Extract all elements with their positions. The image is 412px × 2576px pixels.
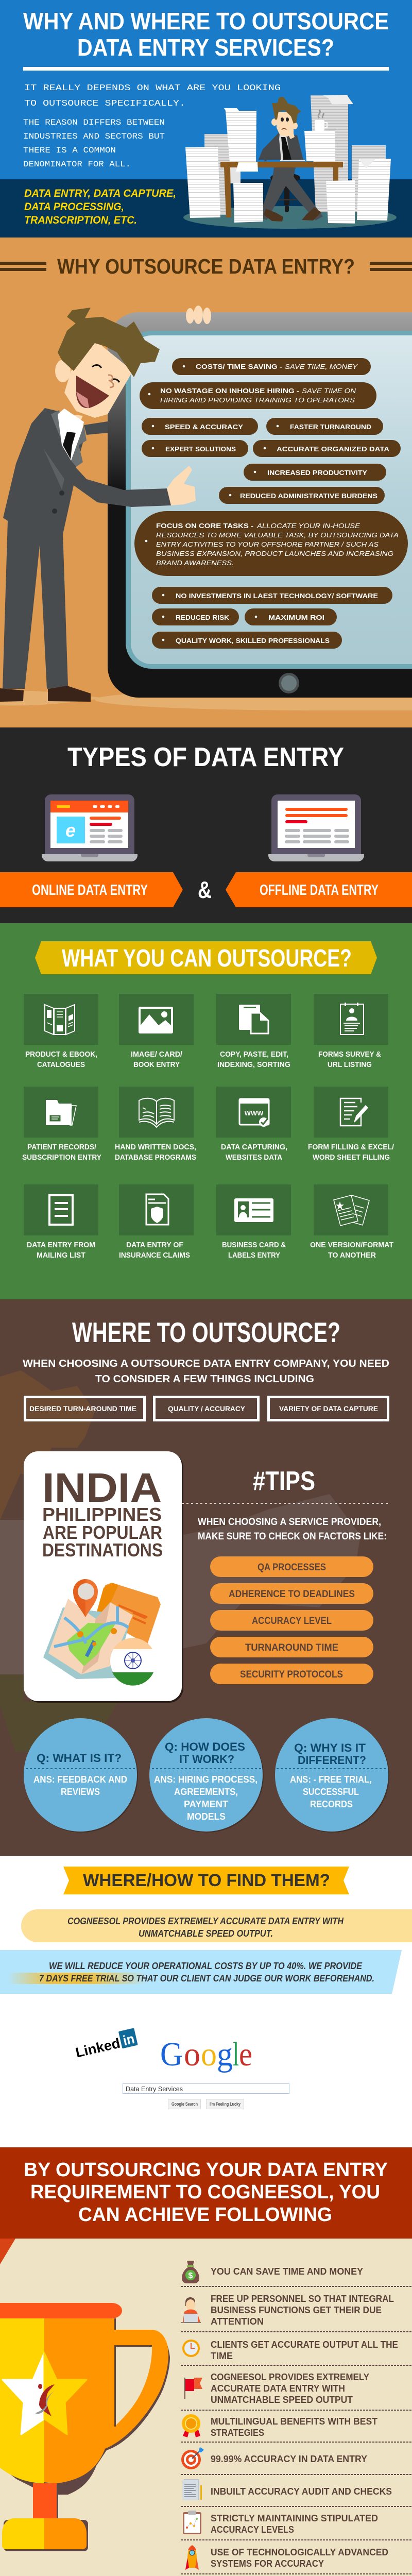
intro text block: INDUSTRIES AND SECTORS BUT <box>23 132 165 141</box>
yellow services text: DATA PROCESSING, <box>24 201 124 213</box>
benefits list text: ATTENTION <box>211 2316 264 2327</box>
panel: where to outsource: VARIETY OF DATA CAPTURE <box>279 1404 378 1413</box>
tile labels: DATABASE PROGRAMS <box>115 1153 196 1162</box>
service tiles <box>24 994 388 1235</box>
tips intro: MAKE SURE TO CHECK ON FACTORS LIKE: <box>198 1531 387 1542</box>
heading ribbon: WHERE/HOW TO FIND THEM? <box>83 1871 330 1890</box>
search box: Data Entry Services <box>126 2085 183 2093</box>
tile labels: SUBSCRIPTION ENTRY <box>22 1153 101 1162</box>
icon: online laptop <box>42 794 138 861</box>
search buttons: I'm Feeling Lucky <box>210 2102 241 2107</box>
intro text block: IT REALLY DEPENDS ON WHAT ARE YOU LOOKING <box>24 83 281 93</box>
icon: trophy <box>0 2303 170 2551</box>
intro text block: DENOMINATOR FOR ALL. <box>23 160 131 169</box>
card: popular destinations: ARE POPULAR <box>43 1522 162 1543</box>
icon: brochure <box>45 1005 75 1035</box>
icon: business card <box>234 1198 273 1222</box>
Q&A ellipse: what is it <box>24 1718 138 1833</box>
logo: Google <box>160 2036 252 2073</box>
intro text block <box>23 83 281 169</box>
callout: accuracy: COGNEESOL PROVIDES EXTREMELY ACCURATE DATA ENTRY WITH <box>67 1916 344 1926</box>
chair <box>270 173 300 212</box>
benefit pill text: BRAND AWARENESS. <box>156 559 234 567</box>
benefits list text: FREE UP PERSONNEL SO THAT INTEGRAL <box>211 2294 394 2304</box>
benefit pill text: INCREASED PRODUCTIVITY <box>267 469 367 477</box>
Q&A ellipse: how does it work <box>149 1718 264 1833</box>
Q&A ellipse: how does it work: ANS: HIRING PROCESS, <box>154 1774 258 1785</box>
icon: copy paste <box>239 1005 268 1033</box>
tip pills: QA PROCESSES <box>258 1562 326 1573</box>
benefits list text: CLIENTS GET ACCURATE OUTPUT ALL THE <box>211 2340 398 2350</box>
Q&A ellipse: why is it different: ANS: - FREE TRIAL, <box>290 1774 372 1785</box>
benefit pill text: SPEED & ACCURACY <box>165 423 243 431</box>
panel: where/how to find them <box>0 1856 412 2147</box>
Q&A ellipse: why is it different <box>275 1718 389 1833</box>
icon: medal <box>182 2414 200 2437</box>
icon: offline laptop <box>268 794 364 861</box>
icon: document and pencil <box>182 2479 202 2500</box>
benefit pill text: HIRING AND PROVIDING TRAINING TO OPERATORS <box>160 396 355 404</box>
heading ribbon <box>63 1867 349 1894</box>
tip pills: TURNAROUND TIME <box>245 1642 338 1653</box>
title <box>23 8 389 71</box>
dashed list dividers <box>181 2286 412 2576</box>
logo: Google: l <box>233 2036 239 2073</box>
icon: money bag: $ <box>188 2272 193 2280</box>
icon: mailing list doc <box>49 1195 73 1225</box>
Q&A ellipse: what is it: Q: WHAT IS IT? <box>37 1752 122 1765</box>
tile labels: FORMS SURVEY & <box>318 1050 381 1059</box>
tile labels: TO ANOTHER <box>328 1251 376 1260</box>
yellow services text: DATA ENTRY, DATA CAPTURE, <box>24 188 176 199</box>
benefits list text: STRICTLY MAINTAINING STIPULATED <box>211 2513 378 2523</box>
Q&A ellipse: why is it different: SUCCESSFUL <box>303 1787 359 1797</box>
benefits list text: USE OF TECHNOLOGICALLY ADVANCED <box>211 2547 388 2557</box>
heading: REQUIREMENT TO COGNEESOL, YOU <box>30 2181 380 2203</box>
benefits list text: STRATEGIES <box>211 2428 264 2438</box>
card: popular destinations: PHILIPPINES <box>42 1504 162 1525</box>
yellow services text <box>24 188 176 226</box>
logo: LinkedIn: in <box>122 2031 136 2048</box>
search buttons <box>168 2099 244 2109</box>
search buttons: Google Search <box>171 2102 198 2107</box>
title: DATA ENTRY SERVICES? <box>77 34 334 61</box>
benefit pill text: MAXIMUM ROI <box>268 614 324 621</box>
panel: achievements <box>0 2147 412 2576</box>
yellow services text: TRANSCRIPTION, ETC. <box>24 214 137 226</box>
benefit pill text: ENTRY ACTIVITIES TO YOUR OFFSHORE PARTNER / SUCH AS <box>156 540 379 548</box>
benefits list text: YOU CAN SAVE TIME AND MONEY <box>211 2266 363 2277</box>
tile labels: CATALOGUES <box>37 1060 85 1069</box>
panel: where to outsource: DESIRED TURN-AROUND TIME <box>29 1404 136 1413</box>
benefit pill text: SAVE TIME ON <box>302 387 356 395</box>
icon: www window: WWW <box>245 1109 264 1117</box>
benefit pill text: RESOURCES TO MORE VALUABLE TASK, BY OUTSOURCING DATA <box>156 531 399 539</box>
tile labels: BOOK ENTRY <box>133 1060 180 1069</box>
logo: Google: o <box>184 2036 200 2073</box>
tile labels: WORD SHEET FILLING <box>313 1153 390 1162</box>
intro text: TO CONSIDER A FEW THINGS INCLUDING <box>95 1374 314 1385</box>
Q&A ellipse: why is it different: RECORDS <box>310 1799 353 1809</box>
tile labels: ONE VERSION/FORMAT <box>310 1241 393 1249</box>
panel: where to outsource: QUALITY / ACCURACY <box>168 1404 246 1413</box>
callout: costs and free trial: 7 DAYS FREE TRIAL SO THAT OUR CLIENT CAN JUDGE OUR WORK BEFOREHAND. <box>39 1973 374 1984</box>
card: popular destinations <box>24 1451 183 1703</box>
Q&A ellipse: why is it different: Q: WHY IS IT <box>294 1741 366 1754</box>
benefit pill text: FASTER TURNAROUND <box>290 423 371 431</box>
benefit pill text: EXPERT SOLUTIONS <box>165 445 236 453</box>
icon: rocket <box>185 2545 199 2570</box>
icon: form filling pen <box>340 1098 368 1126</box>
tile labels: FORM FILLING & EXCEL/ <box>308 1143 394 1151</box>
tile labels: WEBSITES DATA <box>226 1153 282 1162</box>
intro text <box>23 1358 389 1385</box>
panel: where to outsource <box>0 1299 412 1856</box>
intro text block: THE REASON DIFFERS BETWEEN <box>23 118 165 127</box>
heading <box>24 2159 388 2226</box>
intro text: WHEN CHOOSING A OUTSOURCE DATA ENTRY COMPANY, YOU NEED <box>23 1358 389 1369</box>
tip pills <box>210 1556 373 1684</box>
search box <box>123 2083 289 2094</box>
icon: person with laptop <box>181 2297 201 2323</box>
illustration: laughing man pointing at tablet <box>0 308 196 702</box>
benefit pill text <box>156 363 399 645</box>
ampersand: & <box>198 876 212 903</box>
icon: two documents <box>334 1195 369 1226</box>
heading: WHY OUTSOURCE DATA ENTRY? <box>57 255 355 278</box>
tile labels: DATA ENTRY OF <box>126 1241 183 1249</box>
icon: open book <box>139 1098 174 1127</box>
icon: image <box>139 1007 173 1033</box>
tile labels: DATA ENTRY FROM <box>27 1241 95 1249</box>
benefits list text: TIME <box>211 2351 233 2361</box>
tile labels: IMAGE/ CARD/ <box>131 1050 183 1059</box>
background map shapes <box>0 1370 360 1752</box>
tile labels: PATIENT RECORDS/ <box>27 1143 97 1151</box>
desk <box>220 162 343 217</box>
tile labels: MAILING LIST <box>37 1251 85 1260</box>
panel: types of data entry <box>0 727 412 923</box>
benefit pill text: REDUCED RISK <box>176 614 230 621</box>
benefits list text: BUSINESS FUNCTIONS GET THEIR DUE <box>211 2305 382 2315</box>
tile labels: COPY, PASTE, EDIT, <box>220 1050 288 1059</box>
icon: stopwatch clock <box>182 2340 200 2357</box>
tips intro: WHEN CHOOSING A SERVICE PROVIDER, <box>198 1517 381 1528</box>
tile labels: INSURANCE CLAIMS <box>119 1251 190 1260</box>
logo: Google: o <box>201 2036 217 2073</box>
head <box>55 308 160 418</box>
benefit pill text: ACCURATE ORGANIZED DATA <box>277 445 390 453</box>
card: popular destinations: INDIA <box>42 1465 162 1511</box>
benefits list text: ACCURACY LEVELS <box>211 2524 294 2535</box>
intro text block: THERE IS A COMMON <box>23 146 116 155</box>
icon: patient folder <box>46 1100 76 1125</box>
benefit pill text: FOCUS ON CORE TASKS - <box>156 522 253 530</box>
icon: money bag <box>182 2261 199 2283</box>
icon: www window <box>239 1099 269 1127</box>
criteria boxes <box>25 1397 388 1420</box>
benefit pill text: ALLOCATE YOUR IN-HOUSE <box>256 522 360 530</box>
tile labels: LABELS ENTRY <box>228 1251 280 1260</box>
benefits list text: ACCURATE DATA ENTRY WITH <box>211 2383 345 2394</box>
icon: survey form <box>340 1003 364 1035</box>
tip pills: SECURITY PROTOCOLS <box>240 1669 343 1680</box>
logo: Google: g <box>217 2036 233 2073</box>
tile labels: HAND WRITTEN DOCS, <box>115 1143 196 1151</box>
heading: CAN ACHIEVE FOLLOWING <box>78 2204 332 2226</box>
benefit pill text: COSTS/ TIME SAVING - <box>196 363 282 370</box>
benefit pill text: REDUCED ADMINISTRATIVE BURDENS <box>240 492 377 500</box>
tip pills: ADHERENCE TO DEADLINES <box>229 1589 355 1600</box>
logo: LinkedIn: Linked <box>74 2035 122 2061</box>
Q&A ellipse: why is it different: DIFFERENT? <box>298 1754 366 1767</box>
tip pills: ACCURACY LEVEL <box>252 1616 332 1626</box>
tile labels: DATA CAPTURING, <box>221 1143 287 1151</box>
tile labels: INDEXING, SORTING <box>217 1060 290 1069</box>
benefits list text: UNMATCHABLE SPEED OUTPUT <box>211 2395 353 2405</box>
tips heading: #TIPS <box>253 1466 315 1496</box>
tile labels: PRODUCT & EBOOK, <box>25 1050 97 1059</box>
Q&A ellipse: how does it work: MODELS <box>187 1811 226 1822</box>
callout: accuracy <box>21 1909 412 1942</box>
logo mark <box>35 2384 56 2416</box>
intro text block: TO OUTSOURCE SPECIFICALLY. <box>24 99 185 109</box>
benefit pill text: NO INVESTMENTS IN LAEST TECHNOLOGY/ SOFTWARE <box>176 592 378 600</box>
icon: online laptop: e <box>65 820 76 841</box>
benefit pill text: BUSINESS EXPANSION, PRODUCT LAUNCHES AND INCREASING <box>156 550 393 557</box>
callout: costs and free trial: WE WILL REDUCE YOUR OPERATIONAL COSTS BY UP TO 40%. WE PROVIDE <box>49 1961 363 1971</box>
icon: flag <box>184 2378 202 2399</box>
icon: insurance doc <box>146 1194 168 1225</box>
logo: LinkedIn <box>73 2028 138 2061</box>
heading: BY OUTSOURCING YOUR DATA ENTRY <box>24 2159 388 2181</box>
callout: costs and free trial <box>0 1950 402 1994</box>
banner: online data entry: ONLINE DATA ENTRY <box>32 882 148 899</box>
icon: target with dart <box>181 2447 204 2469</box>
logo: Google: G <box>160 2036 183 2073</box>
Q&A ellipse: how does it work: PAYMENT <box>184 1799 228 1809</box>
callout: accuracy: UNMATCHABLE SPEED OUTPUT. <box>139 1928 273 1939</box>
benefit pill text: NO WASTAGE ON INHOUSE HIRING - <box>160 387 299 395</box>
banner: offline data entry <box>226 872 412 907</box>
card: popular destinations: DESTINATIONS <box>42 1539 163 1561</box>
benefits list text: MULTILINGUAL BENEFITS WITH BEST <box>211 2416 377 2427</box>
benefits list text: SYSTEMS FOR ACCURACY <box>211 2558 324 2569</box>
icon: map with pin, booklet and Indian flag <box>43 1579 161 1686</box>
Q&A ellipse: how does it work: Q: HOW DOES <box>165 1740 245 1753</box>
Q&A ellipse: what is it: REVIEWS <box>61 1787 100 1797</box>
man <box>259 97 323 222</box>
Q&A ellipse: how does it work: IT WORK? <box>179 1753 234 1766</box>
panel: what you can outsource <box>0 923 412 1299</box>
benefits list text: INBUILT ACCURACY AUDIT AND CHECKS <box>211 2486 392 2497</box>
logo: Google: e <box>239 2036 252 2073</box>
benefit pill text: SAVE TIME, MONEY <box>285 363 358 370</box>
fingers <box>186 306 211 324</box>
benefits list text: 99.99% ACCURACY IN DATA ENTRY <box>211 2454 367 2464</box>
tile labels: BUSINESS CARD & <box>222 1241 286 1249</box>
panel: intro header <box>0 0 412 238</box>
benefits list text: COGNEESOL PROVIDES EXTREMELY <box>211 2372 369 2382</box>
benefits list text <box>211 2266 398 2576</box>
banner: online data entry <box>0 872 183 907</box>
tile labels: URL LISTING <box>328 1060 372 1069</box>
Q&A ellipse: what is it: ANS: FEEDBACK AND <box>33 1774 127 1785</box>
icon: coffee cup <box>315 110 327 131</box>
tips intro <box>198 1517 387 1542</box>
heading: TYPES OF DATA ENTRY <box>67 742 344 772</box>
benefit pills <box>134 358 408 649</box>
illustration: worried man at desk among paper stacks <box>183 95 397 229</box>
icon: clipboard chart <box>183 2511 201 2534</box>
tile labels <box>22 1050 394 1260</box>
benefit pill text: QUALITY WORK, SKILLED PROFESSIONALS <box>176 637 330 645</box>
tablet <box>108 312 412 698</box>
Q&A ellipse: how does it work: AGREEMENTS, <box>174 1787 238 1797</box>
panel: why outsource data entry <box>0 238 412 727</box>
